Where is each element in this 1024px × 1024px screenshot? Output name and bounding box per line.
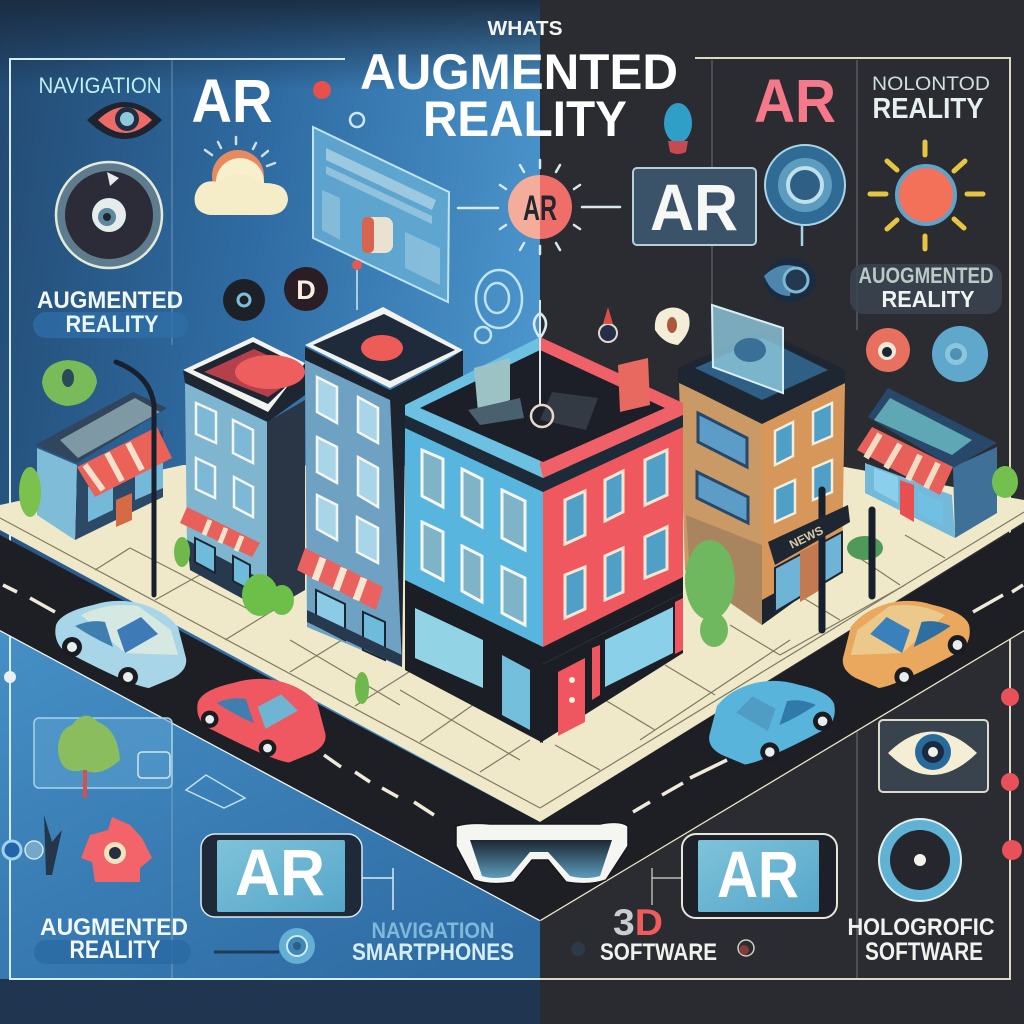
icon: sun right	[870, 142, 983, 249]
title: AUGMENTED	[360, 44, 678, 100]
label: 3D software: SOFTWARE	[600, 939, 717, 966]
car: blue	[709, 681, 835, 764]
icon: lens right	[765, 145, 845, 246]
icon: smartphone AR right: AR	[717, 837, 799, 911]
icon: weather sun and cloud	[195, 137, 288, 215]
label: augmented reality bottom left: AUGMENTED	[40, 914, 188, 941]
label: augmented reality right	[850, 263, 1002, 314]
trees and bushes	[19, 360, 1018, 704]
icon: camera lens	[879, 819, 961, 901]
label: navigation smartphones: NAVIGATION	[372, 918, 494, 943]
label: top right: NOLONTOD	[872, 74, 990, 95]
icon: location ring	[475, 270, 546, 343]
building: right tan	[678, 305, 845, 625]
label: augmented reality bottom left: REALITY	[70, 936, 161, 964]
title: REALITY	[423, 91, 627, 147]
icon: red eye	[87, 102, 162, 139]
background: lower left panel	[0, 630, 540, 1024]
icon: small pins top	[313, 81, 692, 345]
label: augmented reality left: REALITY	[66, 311, 158, 338]
icon: eye panel	[879, 720, 988, 792]
shop: left	[35, 392, 172, 540]
icon: pair of lenses right	[866, 326, 988, 382]
label: augmented reality bottom left	[34, 914, 191, 964]
icon: smartphone AR left: AR	[235, 835, 325, 909]
icon: AR target	[458, 160, 620, 254]
label: navigation smartphones	[352, 918, 514, 966]
label: augmented reality left: AUGMENTED	[37, 287, 183, 314]
icon: smartphone AR right	[652, 834, 837, 918]
building: central corner	[405, 300, 683, 743]
icon: small black circles	[223, 267, 328, 321]
label: top right: REALITY	[872, 93, 984, 125]
label: augmented reality left	[33, 287, 188, 338]
shop: right	[857, 388, 997, 538]
street lamps	[116, 362, 872, 630]
car: light blue	[55, 601, 186, 688]
icon: AR badge: AR	[650, 170, 738, 244]
icon: small black circles: D	[296, 275, 316, 305]
label: holographic software: SOFTWARE	[865, 938, 983, 966]
label: navigation: NAVIGATION	[38, 73, 162, 98]
panel: floating screen	[313, 113, 449, 310]
label: augmented reality right: AUOGMENTED	[858, 263, 994, 288]
plaza tile lines	[0, 512, 1024, 808]
car: tan	[843, 601, 970, 688]
plaza ground	[0, 465, 1024, 822]
icon: smartphone AR left	[201, 834, 393, 917]
background: blue left half	[0, 0, 540, 1024]
icon: camera pin	[764, 258, 816, 302]
shop sign right	[768, 505, 850, 565]
label: navigation smartphones: SMARTPHONES	[352, 939, 514, 966]
car: red	[197, 679, 326, 762]
background: bottom strip left	[0, 979, 540, 1024]
heading: AR right: AR	[754, 67, 836, 135]
shop sign right: NEWS	[787, 523, 825, 552]
background: top shade	[0, 0, 540, 90]
label: 3D software: 3D	[613, 902, 663, 943]
building: tall dark	[297, 307, 463, 667]
road surface	[0, 524, 1024, 920]
building: left	[180, 337, 305, 612]
icon: tree panel	[34, 716, 245, 808]
icon: small dots bottom	[3, 671, 1022, 964]
icon: round dial	[56, 162, 162, 268]
icon: AR target: AR	[523, 189, 557, 228]
label: 3D software	[600, 902, 717, 966]
heading: AR left: AR	[192, 67, 272, 135]
road lane markings	[3, 585, 1023, 815]
icon: AR goggles	[456, 822, 628, 884]
title: WHATS	[488, 18, 562, 40]
title	[360, 18, 678, 147]
label: augmented reality right: REALITY	[882, 286, 974, 312]
background: bottom strip right	[540, 979, 1024, 1024]
label: holographic software: HOLOGROFIC	[848, 914, 994, 941]
label: holographic software	[848, 914, 994, 966]
icon: red map marker	[25, 815, 152, 882]
background: dark right half	[540, 0, 1024, 1024]
label: top right	[872, 74, 990, 125]
